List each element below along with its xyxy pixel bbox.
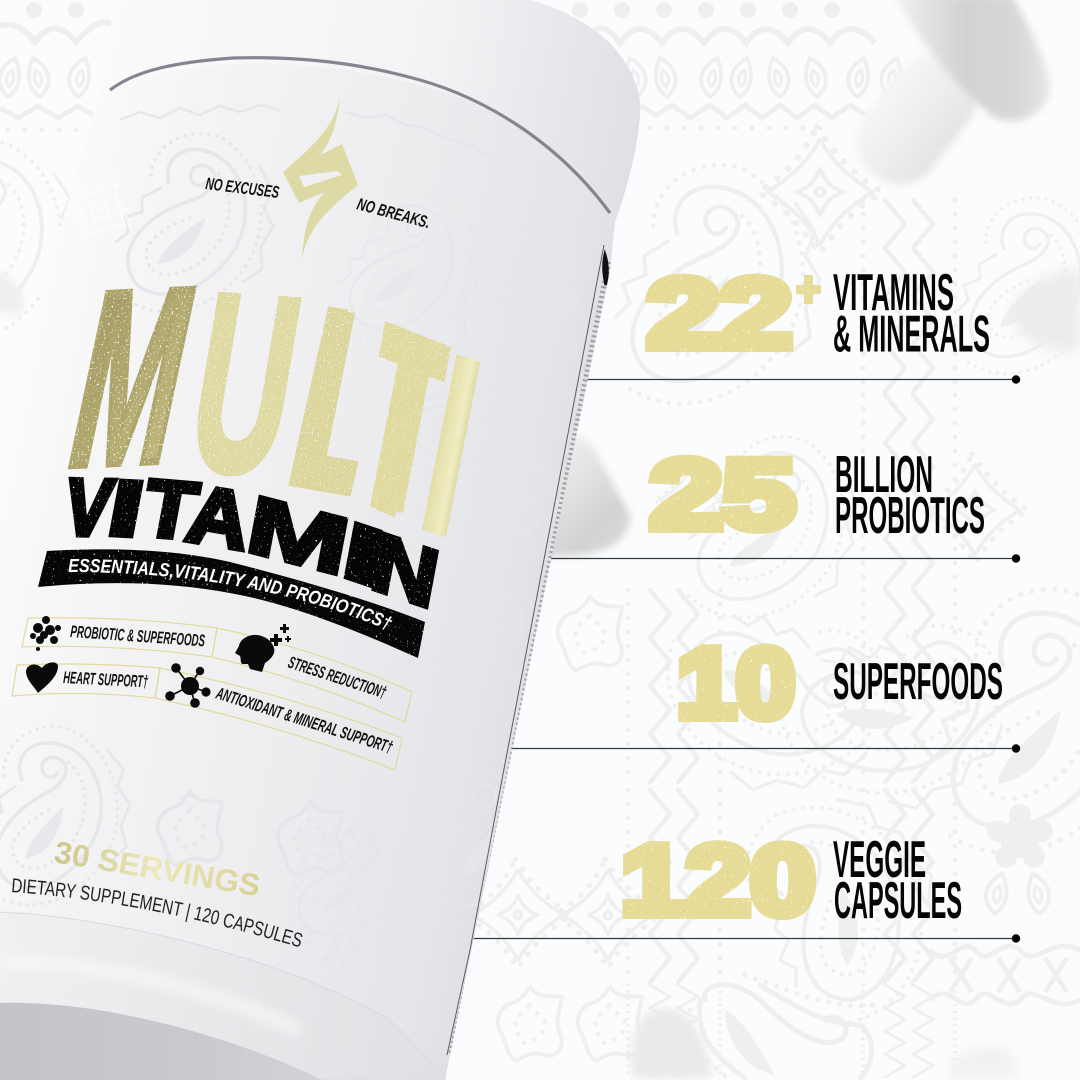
servings text: 30 SERVINGS — [52, 834, 263, 903]
label text: HEART SUPPORT† — [63, 668, 149, 691]
number 22+: 22 — [647, 258, 792, 368]
product name: VITAMIN: A — [180, 468, 258, 567]
divider line 3 — [490, 744, 1020, 753]
feature box: antioxidant and mineral support — [155, 663, 402, 770]
label text: ANTIOXIDANT & MINERAL SUPPORT† — [213, 684, 395, 757]
slogan right: NO BREAKS. — [355, 195, 432, 232]
stat: 25 billion probiotics — [650, 439, 985, 549]
product name: VITAMIN: N — [365, 515, 445, 626]
number 120: 120 — [621, 825, 815, 935]
feature box: probiotic and superfoods — [22, 616, 217, 657]
bottle body and cap — [0, 0, 798, 1080]
label: BILLION — [835, 446, 933, 504]
number 10: 10 — [677, 628, 795, 738]
label: VEGGIE — [833, 831, 926, 889]
product name: MULTI: T — [344, 271, 459, 576]
product name: MULTI: L — [271, 256, 404, 547]
cap groove — [110, 58, 610, 213]
label — [833, 264, 990, 364]
divider line 2 — [520, 554, 1020, 563]
icon: heart — [26, 662, 58, 693]
icon: probiotic cluster — [30, 616, 61, 651]
feature box: stress reduction — [212, 624, 412, 722]
feature box: heart support — [12, 662, 160, 698]
divider line 4 — [450, 934, 1020, 943]
product name: MULTI — [51, 235, 502, 595]
embossed label pattern — [0, 104, 400, 906]
side fine print strip — [447, 245, 604, 1055]
product name: MULTI: U — [174, 241, 316, 527]
product name: VITAMIN: V — [57, 462, 119, 553]
tagline banner — [38, 549, 425, 658]
stat: 22+ vitamins and minerals — [647, 258, 990, 368]
product name: VITAMIN: M — [240, 478, 356, 593]
bottle underside — [0, 1003, 322, 1080]
stat: 10 superfoods — [677, 628, 1003, 738]
icon: head with plus signs — [235, 624, 291, 672]
dietary supplement text: DIETARY SUPPLEMENT | 120 CAPSULES — [12, 878, 302, 947]
base ring — [0, 912, 450, 1080]
number 25: 25 — [650, 439, 795, 549]
tagline banner: ESSENTIALS,VITALITY AND PROBIOTICS† — [68, 558, 392, 630]
label text: STRESS REDUCTION† — [286, 653, 389, 702]
number 22+ — [647, 258, 821, 368]
label text: PROBIOTIC & SUPERFOODS — [70, 622, 206, 650]
brand logo — [283, 97, 358, 262]
product name: MULTI: I — [400, 295, 502, 595]
slogan left: NO EXCUSES — [205, 174, 281, 202]
stat: 120 veggie capsules — [621, 825, 962, 935]
divider line 1 — [560, 375, 1020, 384]
product name: VITAMIN — [57, 462, 445, 626]
supplement bottle — [0, 0, 798, 1080]
label — [835, 446, 985, 545]
product name: VITAMIN: T — [136, 462, 204, 557]
icon: molecule — [165, 663, 211, 708]
product name: VITAMIN: I — [100, 464, 152, 555]
product name: MULTI: M — [51, 235, 214, 519]
label: VITAMINS — [833, 264, 954, 322]
product name: VITAMIN: I — [333, 503, 393, 607]
label — [833, 831, 962, 930]
